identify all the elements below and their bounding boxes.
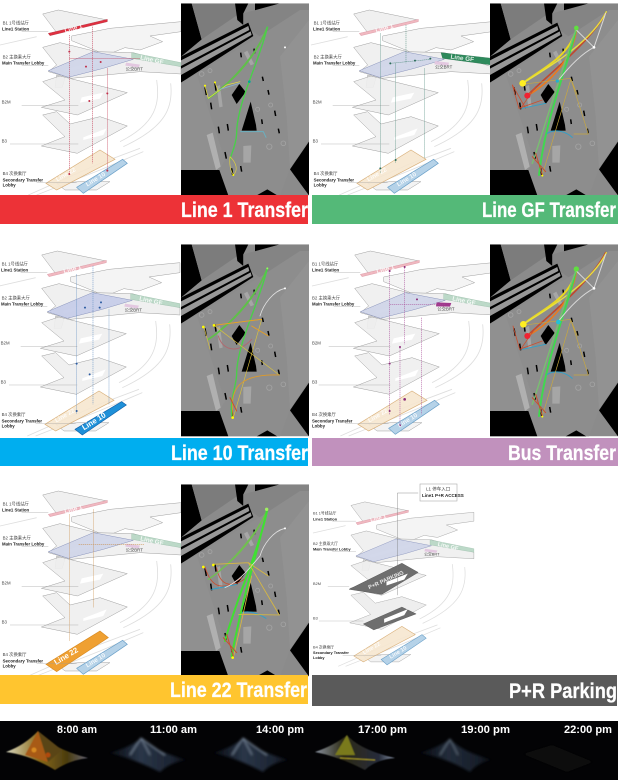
isometric diagram: Line 1: B3 xyxy=(2,138,8,143)
isometric diagram: Line GF: Main Transfer Lobby xyxy=(313,61,356,66)
panel: Line 1 Transfer xyxy=(0,3,309,224)
banner: Line 1 Transfer: Line 1 Transfer xyxy=(181,198,309,222)
isometric diagram: Bus: B2M xyxy=(312,340,321,345)
time labels: 11:00 am xyxy=(150,724,197,736)
map: Line 10 routes xyxy=(181,244,309,436)
banner: Line 10 Transfer: Line 10 Transfer xyxy=(171,441,309,465)
map: Line 1 routes xyxy=(181,3,309,195)
pyramid: 17:00 pm xyxy=(315,735,395,770)
isometric diagram: Line 10: B2M xyxy=(1,340,10,345)
isometric diagram: Line 22: B1 1号线站厅 xyxy=(3,500,30,507)
isometric diagram: P+R xyxy=(313,493,474,666)
isometric diagram: Line 10: Line 22 xyxy=(54,407,77,424)
isometric diagram: Line 10: Main Transfer Lobby xyxy=(1,302,44,307)
time labels: 17:00 pm xyxy=(358,724,407,736)
isometric diagram: Line 1: Secondary Transfer xyxy=(3,177,43,182)
isometric diagram: P+R: Main Transfer Lobby xyxy=(313,547,351,551)
pyramid: 8:00 am xyxy=(6,731,88,770)
isometric diagram: Line 1 xyxy=(0,10,181,195)
isometric diagram: Line GF: B3 xyxy=(313,138,319,143)
isometric diagram: Line 1: B1 1号线站厅 xyxy=(3,19,30,26)
isometric diagram: Line 22: Line 1 xyxy=(64,504,84,515)
isometric diagram: Bus: Line 10 xyxy=(397,412,419,429)
isometric diagram: Bus: Line 1 xyxy=(376,264,396,275)
isometric diagram: P+R: B3 xyxy=(313,617,318,621)
banner: P+R Parking xyxy=(312,675,617,706)
pyramid: 11:00 am xyxy=(108,738,188,772)
isometric diagram: Line 22: Secondary Transfer xyxy=(3,658,43,663)
banner: Bus Transfer xyxy=(312,438,618,466)
isometric diagram: Line 22: Line1 Station xyxy=(2,508,30,513)
isometric diagram: Line 1: B4 次换乘厅 xyxy=(3,170,27,177)
isometric diagram: P+R: Line GF xyxy=(437,542,459,552)
isometric diagram: P+R: 公交BRT xyxy=(424,552,440,557)
map: Line 22 routes xyxy=(181,484,309,676)
time labels: 19:00 pm xyxy=(461,724,510,736)
isometric diagram: Line GF: 公交BRT xyxy=(435,63,453,70)
callout: L1 P+R access: Line1 P+R ACCESS xyxy=(422,493,464,498)
panel: P+R Parking xyxy=(312,484,617,706)
isometric diagram: Line 1: Main Transfer Lobby xyxy=(2,61,45,66)
isometric diagram: Bus: Secondary Transfer xyxy=(312,418,353,423)
isometric diagram: Line 22: Line GF xyxy=(140,535,164,547)
isometric diagram: Line 22: Line 10 xyxy=(85,652,107,669)
isometric diagram: Line 10: B4 次换乘厅 xyxy=(2,411,26,418)
panel: Line GF Transfer xyxy=(311,3,618,224)
isometric diagram: Line 1: B2 主换乘大厅 xyxy=(3,54,31,61)
isometric diagram: Line 22: B2M xyxy=(2,580,11,585)
isometric diagram: Line 22: 公交BRT xyxy=(126,546,143,553)
isometric diagram: Line 1: Line 22 xyxy=(55,166,78,183)
isometric diagram: Bus: Line1 Station xyxy=(312,268,340,273)
isometric diagram: Line GF: B2 主换乘大厅 xyxy=(314,54,342,61)
isometric diagram: Bus: B2 主换乘大厅 xyxy=(312,295,341,302)
isometric diagram: Line 22: Lobby xyxy=(3,664,16,669)
isometric diagram: P+R: B2M xyxy=(313,582,321,586)
pyramid: 22:00 pm xyxy=(523,745,593,772)
isometric diagram: Line 22: Main Transfer Lobby xyxy=(2,542,45,547)
banner: Line 22 Transfer xyxy=(0,675,308,704)
isometric diagram: Line 10: Line 10 xyxy=(80,410,107,432)
isometric diagram: Line 10: B3 xyxy=(1,379,7,384)
map: Bus routes xyxy=(490,244,618,436)
timeline: lighting through the day xyxy=(0,721,618,780)
isometric diagram: Bus: B4 次换乘厅 xyxy=(312,411,336,418)
isometric diagram: Line 10: Lobby xyxy=(2,424,15,429)
isometric diagram: Line 10: B1 1号线站厅 xyxy=(2,260,29,267)
isometric diagram: Line 22 xyxy=(0,491,181,676)
isometric diagram: Line GF: B1 1号线站厅 xyxy=(314,19,341,26)
isometric diagram: P+R: P+R PARKING xyxy=(368,570,405,591)
isometric diagram: Line 10: 公交BRT xyxy=(125,306,142,313)
isometric diagram: P+R: Line 1 xyxy=(370,514,387,524)
time labels: 8:00 am xyxy=(57,724,97,736)
banner: Line GF Transfer xyxy=(312,195,618,224)
isometric diagram: Line 1: Line GF xyxy=(140,54,164,66)
isometric diagram: Line 1: B2M xyxy=(2,99,11,104)
isometric diagram: Line GF: B2M xyxy=(313,99,322,104)
isometric diagram: Line 22: Line 22 xyxy=(52,645,80,667)
isometric diagram: P+R: Secondary Transfer xyxy=(313,651,349,655)
banner: Line 10 Transfer xyxy=(0,438,309,466)
isometric diagram: Line GF: Line1 Station xyxy=(313,27,341,32)
isometric diagram: Line 1: Line 1 xyxy=(64,23,84,34)
isometric diagram: Line 1: 公交BRT xyxy=(126,65,143,72)
isometric diagram: P+R: B2 主换乘大厅 xyxy=(313,541,338,546)
isometric diagram: Line GF: Secondary Transfer xyxy=(314,177,354,182)
panel: Line 22 Transfer xyxy=(0,484,309,704)
callout: L1 P+R access xyxy=(420,484,464,501)
isometric diagram: Line 22: B4 次换乘厅 xyxy=(3,651,27,658)
time labels: 14:00 pm xyxy=(256,724,304,736)
isometric diagram: Bus: Line 22 xyxy=(367,407,390,424)
callout: L1 P+R access: L1 停车入口 xyxy=(426,486,450,492)
isometric diagram: P+R: B4 次换乘厅 xyxy=(313,645,334,650)
isometric diagram: P+R: Line 22 xyxy=(362,641,382,656)
isometric diagram: Line 22: B2 主换乘大厅 xyxy=(3,535,31,542)
isometric diagram: Bus: 公交BRT xyxy=(437,306,455,313)
isometric diagram: Line 10: Line1 Station xyxy=(1,268,29,273)
map: Line GF routes xyxy=(490,3,618,195)
time labels xyxy=(57,724,612,736)
isometric diagram: P+R: Lobby xyxy=(313,656,325,660)
isometric diagram: Bus: Line GF xyxy=(452,295,476,307)
isometric diagram: Line 1: Line1 Station xyxy=(2,27,30,32)
isometric diagram: Line GF xyxy=(311,10,492,195)
isometric diagram: P+R: Line 10 xyxy=(389,645,408,661)
isometric diagram: Line 10: Line 1 xyxy=(63,264,83,275)
isometric diagram: Line GF: Lobby xyxy=(314,183,327,188)
isometric diagram: Line GF: B4 次换乘厅 xyxy=(314,170,338,177)
isometric diagram: Line GF: Line 10 xyxy=(396,171,418,188)
isometric diagram: P+R: B1 1号线站厅 xyxy=(313,511,336,516)
panel: Line 10 Transfer xyxy=(0,244,309,466)
isometric diagram: Bus: Lobby xyxy=(312,424,326,429)
isometric diagram: Line 10: Secondary Transfer xyxy=(2,418,42,423)
isometric diagram: Line GF: Line GF xyxy=(450,54,474,64)
isometric diagram: P+R: Line1 Station xyxy=(313,517,338,521)
isometric diagram: Line GF: Line 1 xyxy=(375,23,395,34)
isometric diagram: Bus xyxy=(312,251,493,436)
isometric diagram: Line 10 xyxy=(0,251,180,436)
isometric diagram: Bus: B1 1号线站厅 xyxy=(312,260,339,267)
panel: Bus Transfer xyxy=(312,244,618,466)
pyramid: 19:00 pm xyxy=(418,739,493,772)
time labels: 22:00 pm xyxy=(564,724,612,736)
isometric diagram: Line 1: Lobby xyxy=(3,183,16,188)
isometric diagram: Bus: B3 xyxy=(312,379,318,384)
isometric diagram: Line 10: Line GF xyxy=(139,295,163,307)
isometric diagram: Bus: Main Transfer Lobby xyxy=(312,302,355,307)
banner: Line 1 Transfer xyxy=(0,195,309,224)
isometric diagram: Line 22: B3 xyxy=(2,619,8,624)
pyramid: 14:00 pm xyxy=(212,738,290,772)
banner: Line 22 Transfer: Line 22 Transfer xyxy=(170,678,308,702)
isometric diagram: Line 1: Line 10 xyxy=(85,171,107,188)
isometric diagram: Line 10: B2 主换乘大厅 xyxy=(2,295,30,302)
isometric diagram: Line GF: Line 22 xyxy=(366,166,389,183)
